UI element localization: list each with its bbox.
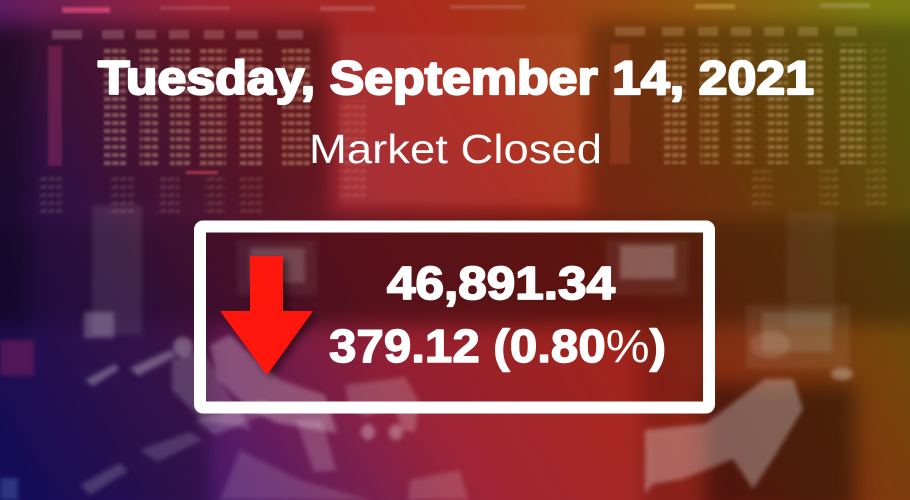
- background: wall pillars and screens: [0, 205, 850, 376]
- panel: index value frame: [200, 226, 709, 408]
- background: left price board: [40, 30, 366, 214]
- background: center panel: [340, 35, 580, 205]
- background: seated people and chairs: [0, 331, 853, 500]
- index value: 46,891.34: [387, 257, 615, 309]
- icon: red down arrow: [220, 256, 313, 375]
- index change: 379.12 (0.80 %): [329, 320, 666, 372]
- background: right price board: [610, 27, 888, 210]
- background: top ticker row: [62, 3, 870, 13]
- date heading: Tuesday, September 14, 2021: [98, 51, 814, 104]
- subheading: market status: Market Closed: [309, 126, 602, 172]
